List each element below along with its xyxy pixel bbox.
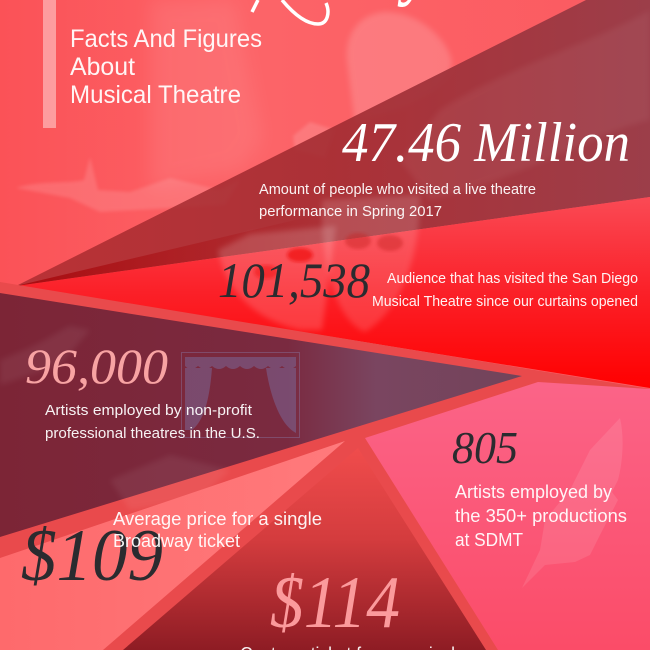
panel: bright red wedge [16,197,650,388]
stat: 101,538: Musical Theatre since our curtains opened [372,293,638,310]
panel: gray wedge [16,0,650,286]
dim hands over purple wedge [0,326,230,510]
stat: 805: 805 [452,422,518,473]
dancer arm through gray wedge [400,10,650,200]
heading: Facts And Figures [70,25,262,53]
stat: 109 dollars [21,509,322,597]
stat: 96,000: professional theatres in the U.S. [45,425,260,442]
icon: stage curtain [182,352,300,438]
icon: feather [522,418,623,588]
panel: pink wedge [365,382,650,650]
stat: 805: at SDMT [455,530,523,550]
panel: salmon wedge [0,441,345,650]
stat: 114 dollars [240,562,455,650]
heading: Musical Theatre [70,81,241,109]
stat: 109 dollars: Broadway ticket [113,531,240,551]
stat: 47.46 Million: 47.46 Million [342,112,630,174]
icon: theatre masks [218,195,420,332]
stat: 109 dollars: Average price for a single [113,509,322,529]
panel: red band behind lower panels [0,282,650,650]
heading: About [70,53,135,81]
dark sliver at wedge apex [16,213,325,286]
stat: 101,538: Audience that has visited the San Diego [387,270,638,287]
stat: 805: the 350+ productions [455,506,627,526]
panel: purple wedge [0,293,522,537]
dancer photo overlay [16,0,452,212]
stat: 96,000 [25,338,260,442]
stat: 805: Artists employed by [455,482,612,502]
side bar [43,0,56,128]
stat: 114 dollars: $114 [270,562,400,644]
stat: 101,538: 101,538 [218,252,370,308]
stat: 47.46 Million: performance in Spring 2017 [259,203,442,220]
stat: 101,538 [218,252,638,310]
heading [70,25,262,109]
panel: dark red wedge [123,448,486,650]
script title [242,0,434,24]
stat: 47.46 Million [259,112,630,220]
stat: 96,000: Artists employed by non-profit [45,402,253,419]
stat: 109 dollars: $109 [21,515,163,597]
stat: 47.46 Million: Amount of people who visited a live theatre [259,181,536,198]
stat: 805 [452,422,627,550]
stat: 96,000: 96,000 [25,338,168,394]
